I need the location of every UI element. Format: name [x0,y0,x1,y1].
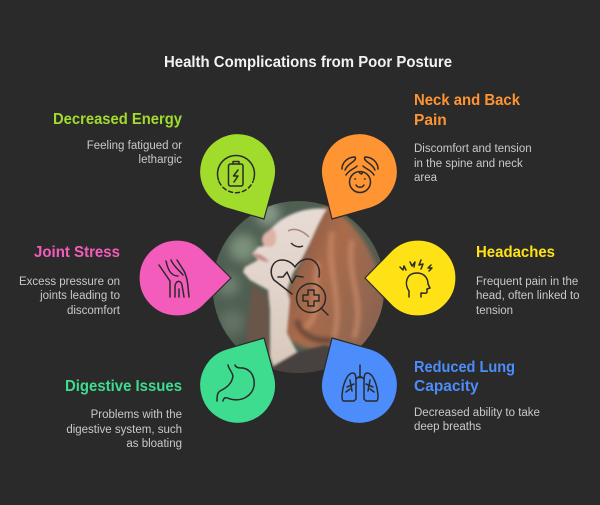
icon: battery [218,156,254,193]
text: digestive issues description [66,409,182,450]
text: digestive issues description: digestive system, such [66,424,182,436]
panel: decreased energy drop [200,134,276,219]
panel: headaches drop [365,240,456,316]
heading: headaches: Headaches [476,244,555,261]
heading: neck and back pain [414,92,520,129]
heading: reduced lung capacity: Reduced Lung [414,359,515,376]
text: joint stress description: discomfort [67,305,121,317]
heading: digestive issues: Digestive Issues [65,378,182,395]
heading: decreased energy: Decreased Energy [53,111,182,128]
text: reduced lung capacity description: Decreased ability to take [414,407,540,419]
heading: reduced lung capacity: Capacity [414,378,479,395]
text: joint stress description [19,276,121,317]
text: decreased energy description: Feeling fatigued or [87,140,182,152]
text: headaches description: head, often linked to [476,290,580,302]
text: neck and back pain description: Discomfort and tension [414,143,532,155]
icon: stomach [217,365,254,401]
text: neck and back pain description: area [414,172,438,184]
text: joint stress description: joints leading to [39,290,120,302]
text: digestive issues description: as bloating [126,438,182,450]
text: headaches description [476,276,580,317]
heading: joint stress: Joint Stress [34,244,120,261]
text: headaches description: tension [476,305,513,317]
heading: neck and back pain: Neck and Back [414,92,520,109]
text: decreased energy description [87,140,182,166]
icon: head with lightning [400,260,432,297]
icon: baby face with protective hands [342,157,378,192]
text: headaches description: Frequent pain in the [476,276,578,288]
text: neck and back pain description [414,143,532,184]
icon: heart with magnifier and medical cross [271,259,328,315]
panel: digestive issues drop [200,338,276,423]
text: digestive issues description: Problems with the [91,409,182,421]
title: Health Complications from Poor Posture [164,54,452,71]
panel: joint stress drop [139,240,231,316]
icon: knee joint [159,260,189,297]
central photo: woman with head tilted back [212,200,390,380]
heading: neck and back pain: Pain [414,112,447,129]
panel: neck and back pain drop [321,134,397,219]
text: joint stress description: Excess pressure on [19,276,120,288]
heading: reduced lung capacity [414,359,515,395]
text: decreased energy description: lethargic [139,154,182,166]
text: neck and back pain description: in the spine and neck [414,158,523,170]
text: reduced lung capacity description [414,407,540,433]
text: reduced lung capacity description: deep breaths [414,421,481,433]
panel: reduced lung capacity drop [321,338,397,423]
icon: lungs [342,365,378,401]
